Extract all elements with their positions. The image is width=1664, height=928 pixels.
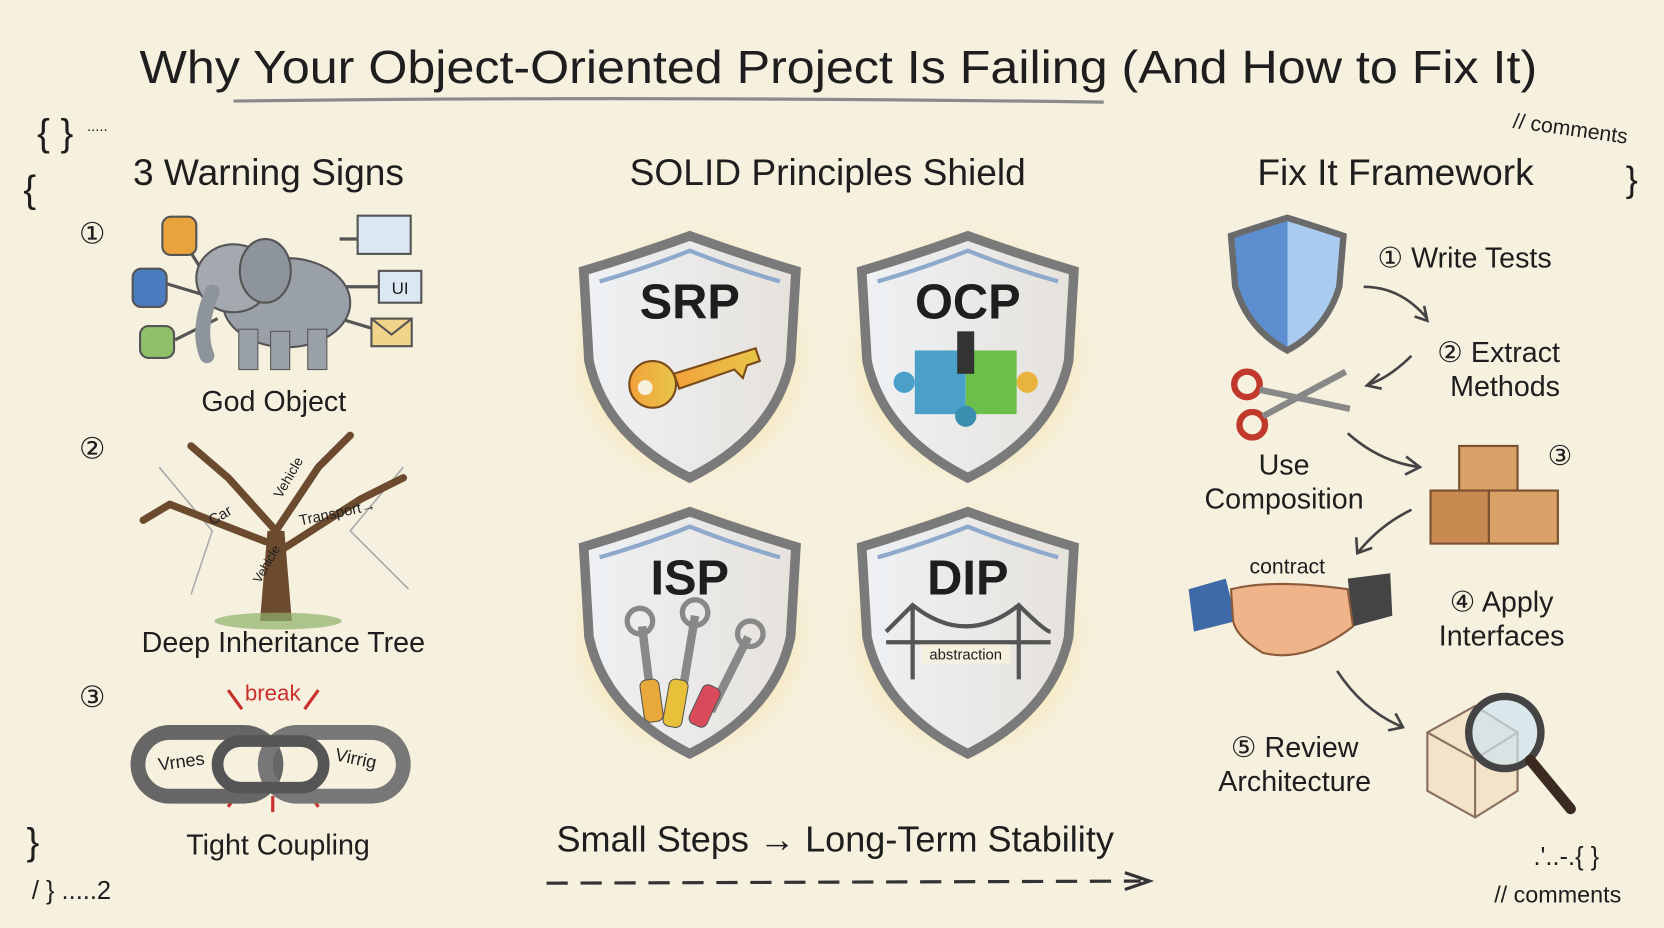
caption arrow: small steps (547, 818, 1149, 890)
sign 3: tight coupling: Virrig (333, 744, 378, 773)
sign 2: deep inheritance tree: Car (206, 503, 235, 529)
heading: Fix It Framework: Fix It Framework (1257, 151, 1534, 193)
shield: DIP: DIP (927, 552, 1009, 606)
step 1 label: ① Write Tests (1377, 243, 1552, 275)
panel: fix it framework (1189, 218, 1572, 817)
step 3 label: use composition: Use (1259, 450, 1310, 482)
icon: cube with magnifier (1427, 696, 1571, 817)
step 3 label: use composition: Composition (1204, 484, 1364, 516)
arrow 3 (1348, 433, 1420, 475)
step 2 label (1437, 337, 1560, 403)
heading: SOLID Principles Shield: SOLID Principles Shield (630, 151, 1026, 193)
step 5 label: Architecture (1218, 766, 1371, 798)
caption arrow: small steps: Small Steps → Long-Term Stability (556, 818, 1114, 859)
decorations: code braces: // comments (1512, 110, 1629, 149)
sign 3: tight coupling: Vrnes (157, 748, 206, 775)
arrow 2 (1367, 356, 1411, 389)
step 4 label: Interfaces (1439, 620, 1565, 652)
decorations: code braces: // comments (1494, 881, 1621, 907)
sign 2: deep inheritance tree: Vehicle (271, 454, 306, 501)
sign 1: god object: UI (392, 279, 409, 298)
step 2 label: ② Extract (1437, 337, 1560, 369)
sign 3: tight coupling (79, 681, 403, 862)
decorations: code braces: { (23, 168, 36, 211)
icon: handshake contract: contract (1250, 555, 1325, 578)
arrow 1 (1364, 287, 1427, 321)
step 4 label (1439, 587, 1565, 652)
sign 2: deep inheritance tree: ② (79, 433, 106, 466)
decorations: code braces: { } (37, 112, 74, 155)
step 5 label: ⑤ Review (1231, 732, 1359, 764)
icon: handshake contract (1189, 555, 1392, 655)
sign 2: deep inheritance tree: Deep Inheritance Tree (142, 627, 425, 659)
title: Why Your Object-Oriented Project Is Failing (And How to Fix It) (140, 41, 1537, 93)
sign 3: tight coupling: Tight Coupling (186, 830, 370, 862)
decorations: code braces: .'..-.{ } (1533, 843, 1600, 871)
sign 3: tight coupling: break (245, 681, 301, 706)
shield: SRP: SRP (640, 276, 740, 330)
sign 2: deep inheritance tree: Transport→ (298, 498, 377, 529)
sign 2: deep inheritance tree (79, 433, 425, 659)
sign 2: deep inheritance tree: Vehicle (250, 542, 283, 585)
step 5 label (1218, 732, 1371, 798)
step 4 label: ④ Apply (1450, 587, 1554, 619)
arrow 4 (1356, 510, 1411, 553)
sign 3: tight coupling: ③ (79, 681, 106, 714)
step 3 label: use composition (1204, 450, 1364, 516)
icon: boxes (1431, 440, 1572, 544)
step 1 shield icon (1231, 218, 1344, 350)
heading: 3 Warning Signs: 3 Warning Signs (133, 151, 404, 193)
panel: SOLID shields (552, 212, 1106, 775)
sign 1: god object (79, 216, 421, 418)
shield: DIP: abstraction (929, 647, 1002, 663)
sign 1: god object: God Object (201, 386, 346, 418)
shield: SRP (584, 236, 796, 478)
shield: OCP (862, 236, 1074, 478)
arrow 5 (1337, 671, 1403, 730)
decorations: code braces: } (27, 821, 40, 864)
panel: warning signs (79, 216, 425, 862)
icon: boxes: ③ (1548, 440, 1572, 471)
sign 1: god object: ① (79, 217, 106, 250)
shield: ISP: ISP (650, 552, 729, 606)
decorations: code braces: } (1626, 158, 1638, 199)
decorations: code braces: / } .....2 (32, 877, 111, 905)
shield: ISP (584, 512, 796, 754)
shield: DIP (862, 512, 1074, 754)
decorations: code braces: ..... (87, 119, 108, 135)
shield: OCP: OCP (915, 276, 1021, 330)
step 2 label: Methods (1450, 371, 1560, 403)
icon: scissors (1234, 372, 1350, 437)
